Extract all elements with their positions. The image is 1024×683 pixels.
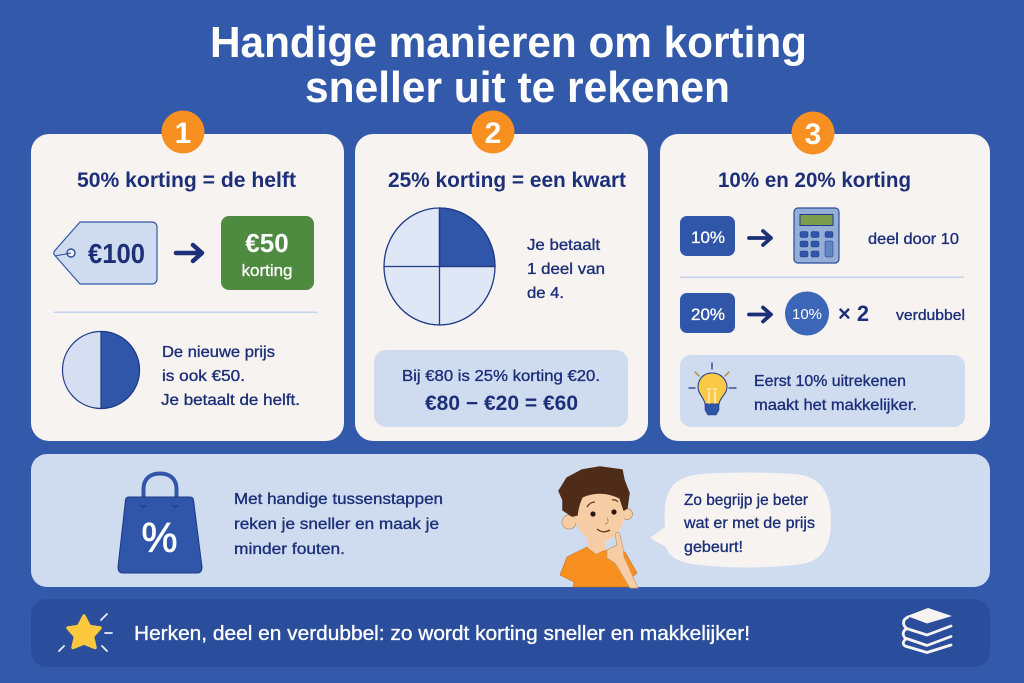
heading: 50% korting = de helft: 50% korting = de helft [77,169,296,192]
heading: 10% en 20% korting: 10% en 20% korting [718,169,911,192]
10% circle [785,292,829,336]
title [210,18,807,112]
icon: light bulb [689,363,736,415]
number badge 2 [472,110,514,154]
price tag €100 [54,222,157,284]
speech bubble: gebeurt! [684,539,743,556]
arrow [176,245,202,261]
example box: €80 − €20 = €60 [425,392,578,415]
text: nieuwe prijs: Je betaalt de helft. [161,392,300,409]
icon: star [59,614,112,651]
panel: 50% korting [31,110,344,441]
quarter pie chart [384,208,495,325]
number badge 1 [162,110,204,154]
10% circle: 10% [792,306,822,323]
text: tip: Eerst 10% uitrekenen [754,373,906,390]
times two: × 2 [838,301,869,326]
icon: shopping bag [118,474,202,573]
text: je betaalt: de 4. [527,285,564,302]
tip box [680,355,965,427]
text: nieuwe prijs: De nieuwe prijs [162,344,275,361]
text: conclusion: Herken, deel en verdubbel: zo wordt korting sneller en makkelijker! [134,622,750,645]
speech bubble [650,472,831,568]
heading: 25% korting = een kwart: 25% korting = een kwart [388,169,626,192]
arrow [749,231,771,245]
20% badge [680,293,735,333]
text: verdubbel: verdubbel [896,307,965,324]
panel: bottom band [31,454,990,588]
text: tussenstappen: minder fouten. [234,541,345,558]
icon: calculator [794,208,839,263]
green box: €50 korting: korting [241,261,293,280]
text: je betaalt: Je betaalt [527,237,601,254]
arrow [749,308,771,322]
number badge 1: 1 [175,117,191,150]
speech bubble: wat er met de prijs [683,515,815,532]
number badge 3: 3 [805,118,821,151]
text: tussenstappen: Met handige tussenstappen [234,491,443,508]
speech bubble: Zo begrijp je beter [684,492,809,509]
footer banner [31,599,990,667]
text: tip: maakt het makkelijker. [754,397,917,414]
text: nieuwe prijs: is ook €50. [162,368,245,385]
title: sneller uit te rekenen [305,63,730,112]
green box: €50 korting: €50 [245,228,289,258]
text: tip [754,373,917,414]
panel: 10% en 20% korting [660,112,990,441]
text: tussenstappen [234,491,443,558]
20% badge: 20% [691,305,725,324]
10% badge [680,216,735,256]
half pie chart [62,332,140,408]
example box: Bij €80 is 25% korting €20. [402,368,600,385]
text: deel door 10: deel door 10 [868,231,959,248]
example box [374,350,628,427]
icon: books [903,608,952,652]
number badge 3 [792,112,834,154]
text: tussenstappen: reken je sneller en maak je [234,516,439,533]
title: Handige manieren om korting [210,18,807,67]
text: je betaalt [527,237,605,302]
10% badge: 10% [691,228,725,247]
panel: 25% korting [355,110,648,441]
text: je betaalt: 1 deel van [527,261,605,278]
icon: shopping bag: % [142,514,178,561]
number badge 2: 2 [485,117,501,150]
green box: €50 korting [221,216,314,290]
text: nieuwe prijs [161,344,300,409]
illustration: thinking boy [559,467,638,588]
price tag €100: €100 [88,238,145,269]
